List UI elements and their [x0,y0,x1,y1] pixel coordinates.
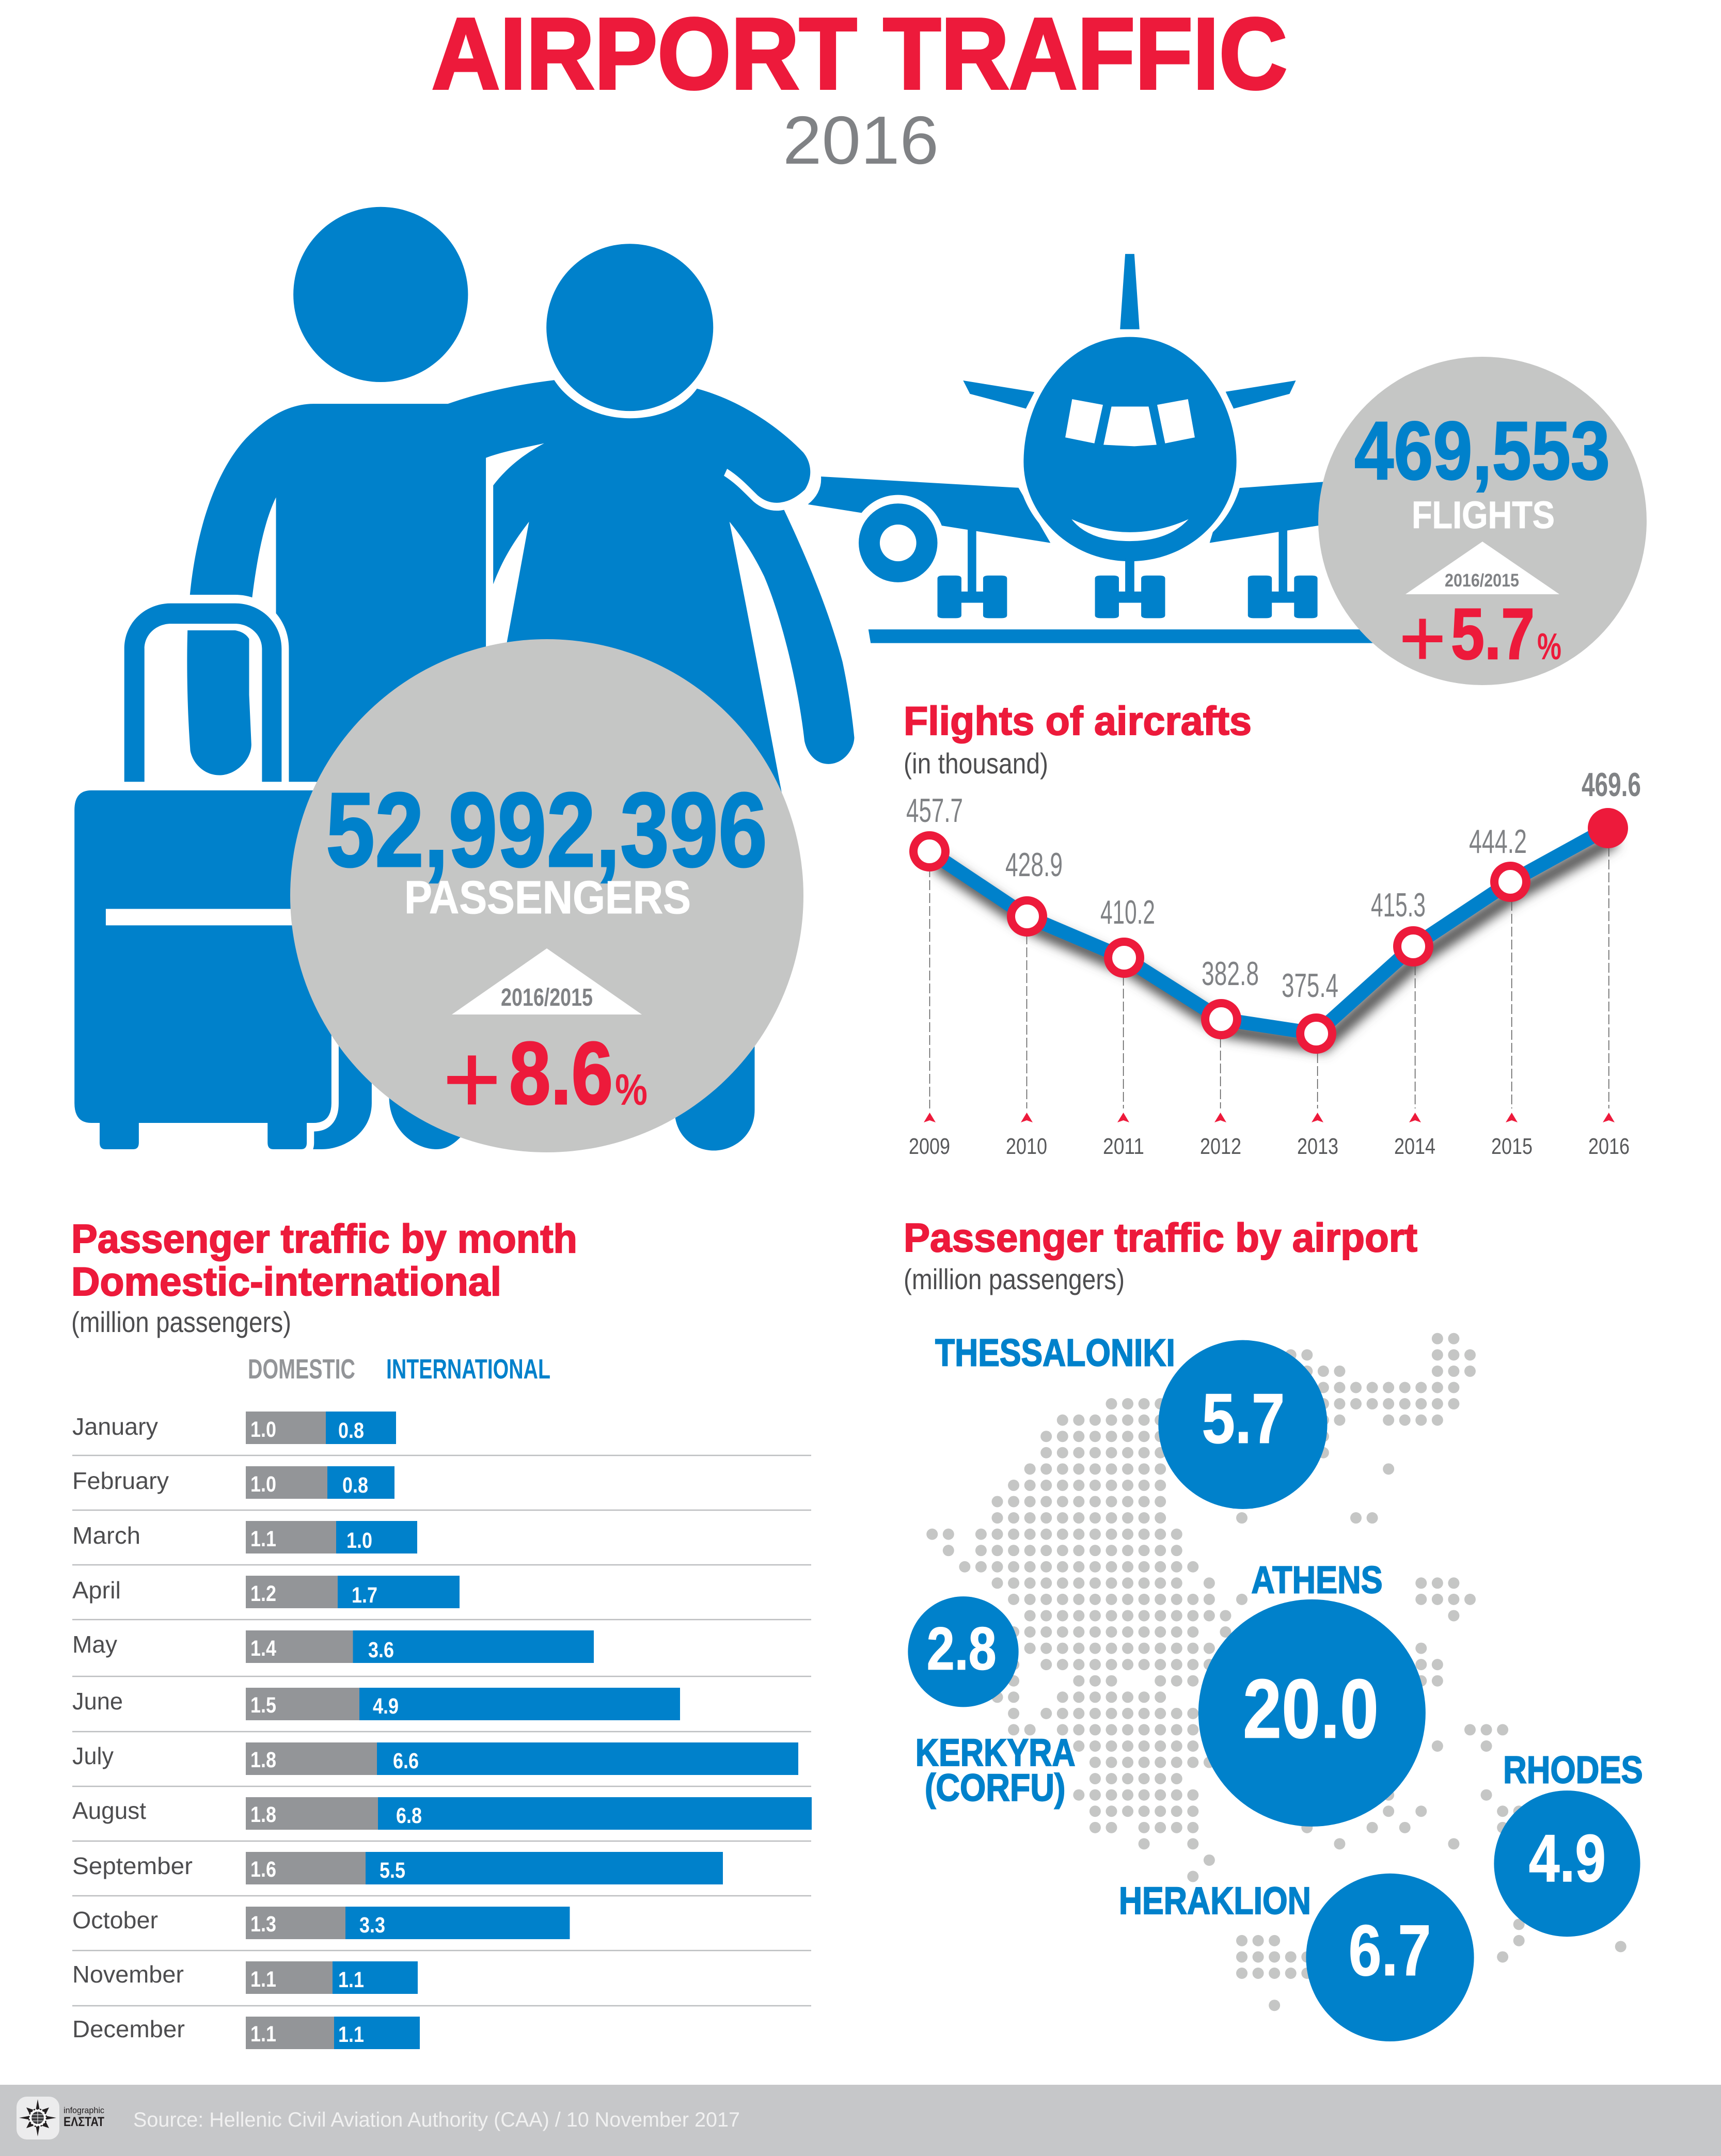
plane cockpit windows [1065,399,1195,446]
value labels: 469.6 [1582,766,1641,803]
chart heading: Flights of aircrafts [904,698,1252,743]
gap between woman and man [486,443,544,662]
band background [0,2085,1721,2156]
airport labels: KERKYRA [915,1731,1076,1774]
bubble: Thessaloniki [1158,1340,1328,1509]
domestic values: 1.8 [250,1748,276,1772]
domestic values: 1.5 [250,1693,276,1718]
dotted map of Greece [932,1339,1621,2005]
year labels: 2012 [1200,1134,1241,1159]
heading [71,1216,577,1304]
international values: 0.8 [338,1418,364,1443]
month labels: July [72,1742,114,1769]
domestic values: 1.4 [250,1636,276,1661]
month labels [72,1413,193,2042]
month labels: April [72,1577,121,1604]
domestic values: 1.3 [250,1912,276,1937]
percent sign: % [1537,626,1561,668]
comparison triangle [452,948,642,1014]
panel: flights circle [1318,357,1647,685]
international values [338,1418,422,2047]
international values: 4.9 [373,1694,399,1719]
international values: 3.6 [368,1638,394,1662]
man hand [187,630,251,775]
domestic values: 1.6 [250,1857,276,1882]
comparison years: 2016/2015 [501,984,593,1011]
percent sign: % [615,1066,648,1115]
year labels: 2015 [1491,1134,1533,1159]
plane landing gear [938,526,1318,618]
value labels: 410.2 [1100,893,1155,931]
international values: 6.6 [393,1749,419,1773]
bubble: Rhodes [1494,1790,1640,1937]
international values: 6.8 [396,1803,422,1828]
month labels: March [72,1522,140,1549]
legend: DOMESTIC [248,1354,355,1385]
airport labels: THESSALONIKI [935,1330,1175,1374]
domestic values: 1.2 [250,1581,276,1606]
airport labels: ATHENS [1251,1558,1383,1601]
flights number: 469,553 [1354,404,1610,497]
logo text: infographic [64,2105,104,2115]
domestic values: 1.0 [250,1472,276,1497]
month labels: January [72,1413,158,1440]
runway bar [869,629,1397,643]
subtitle year: 2016 [783,102,939,178]
panel: dotted map with airport bubbles [908,1330,1643,2041]
heading: Domestic-international [71,1259,501,1304]
circle background [1318,357,1647,685]
year labels: 2010 [1006,1134,1047,1159]
suitcase handle halo [124,604,281,790]
suitcase handle [124,604,281,790]
international bars [326,1412,812,2049]
value labels: 457.7 [906,791,963,829]
domestic bars [246,1412,378,2049]
source: Source: Hellenic Civil Aviation Authority (CAA) / 10 November 2017 [133,2109,740,2131]
international values: 1.1 [338,1968,364,1992]
passengers number: 52,992,396 [326,771,767,889]
icon: airplane [808,254,1397,643]
airport labels: (CORFU) [925,1766,1066,1809]
title: AIRPORT TRAFFIC [432,0,1287,110]
month labels: August [72,1797,146,1824]
plane engine [851,495,945,591]
suitcase stripe [106,909,299,925]
bubble: Thessaloniki: 5.7 [1202,1379,1285,1458]
drop lines [929,847,1609,1108]
plus sign: + [443,1024,501,1134]
domestic values: 1.8 [250,1802,276,1827]
row rules [72,1455,811,2006]
international values: 1.0 [346,1528,372,1553]
year labels [909,1134,1630,1159]
legend: INTERNATIONAL [386,1354,550,1385]
value labels: 375.4 [1282,966,1338,1004]
man head [293,207,468,382]
plane nose smile [1071,519,1189,541]
legend [248,1354,550,1385]
value labels: 415.3 [1371,886,1426,924]
panel: flights line chart [904,698,1641,1159]
flights label: FLIGHTS [1412,494,1555,536]
gap between hand and woman arm [725,472,809,506]
suitcase body [74,790,331,1149]
month labels: October [72,1907,158,1933]
bubble: Kerkyra [908,1596,1019,1707]
chart unit: (in thousand) [904,747,1048,780]
panel: passenger traffic by month [71,1216,812,2049]
airport labels: HERAKLION [1119,1879,1311,1922]
plane fuselage [1023,337,1237,561]
international values: 3.3 [359,1913,385,1938]
comparison years: 2016/2015 [1445,570,1519,591]
bubble: Kerkyra: 2.8 [927,1615,997,1683]
month labels: September [72,1852,193,1879]
domestic values [250,1417,276,2047]
domestic values: 1.0 [250,1417,276,1442]
year labels: 2011 [1103,1134,1144,1159]
month labels: May [72,1631,117,1658]
woman head [546,244,713,411]
logo text [64,2105,104,2129]
plane stabilizers [963,381,1296,409]
international values: 1.1 [338,2022,364,2047]
plane wings [808,477,1340,543]
footer band [0,2085,1721,2156]
heading: Passenger traffic by month [71,1216,577,1261]
unit: (million passengers) [71,1306,291,1338]
airport labels: RHODES [1503,1748,1643,1792]
international values: 1.7 [352,1583,377,1608]
data line [929,828,1608,1034]
bubble: Athens [1198,1599,1426,1827]
airport labels [915,1330,1643,1922]
month labels: December [72,2016,185,2042]
bubble: Rhodes: 4.9 [1529,1820,1606,1896]
panel: passengers circle [290,639,803,1152]
year labels: 2013 [1297,1134,1338,1159]
month labels: June [72,1688,123,1715]
international values: 0.8 [342,1473,368,1498]
plus sign: + [1399,593,1446,683]
domestic values: 1.1 [250,1967,276,1992]
unit: (million passengers) [904,1263,1125,1295]
passengers label: PASSENGERS [404,872,691,924]
domestic values: 1.1 [250,2022,276,2047]
year labels: 2009 [909,1134,950,1159]
value labels: 428.9 [1005,846,1063,883]
icon: star globe logo [19,2099,56,2136]
line shadow [936,839,1615,1044]
panel: passenger traffic by airport heading [904,1215,1417,1295]
axis ticks [924,1113,1615,1122]
bubble: Athens: 20.0 [1243,1662,1379,1756]
data points [913,808,1628,1050]
bodies of man and woman [190,380,854,1151]
bubble: Heraklion [1306,1874,1474,2041]
flights change: 5.7 [1451,593,1535,674]
value labels: 444.2 [1469,822,1527,860]
month labels: February [72,1467,169,1494]
domestic values: 1.1 [250,1527,276,1551]
value labels [906,766,1641,1004]
circle background [290,639,803,1152]
passengers change: 8.6 [509,1024,613,1123]
logo tile [17,2097,59,2139]
comparison triangle [1406,542,1559,594]
logo text: ΕΛΣΤΑΤ [64,2115,104,2129]
year labels: 2016 [1588,1134,1630,1159]
international values: 5.5 [380,1858,405,1883]
month labels: November [72,1961,184,1988]
plane tail fin [1120,254,1140,329]
year labels: 2014 [1394,1134,1435,1159]
icon: travellers with suitcase [74,207,854,1151]
value labels: 382.8 [1202,955,1259,992]
bubble: Heraklion: 6.7 [1349,1910,1431,1991]
heading: Passenger traffic by airport [904,1215,1417,1260]
